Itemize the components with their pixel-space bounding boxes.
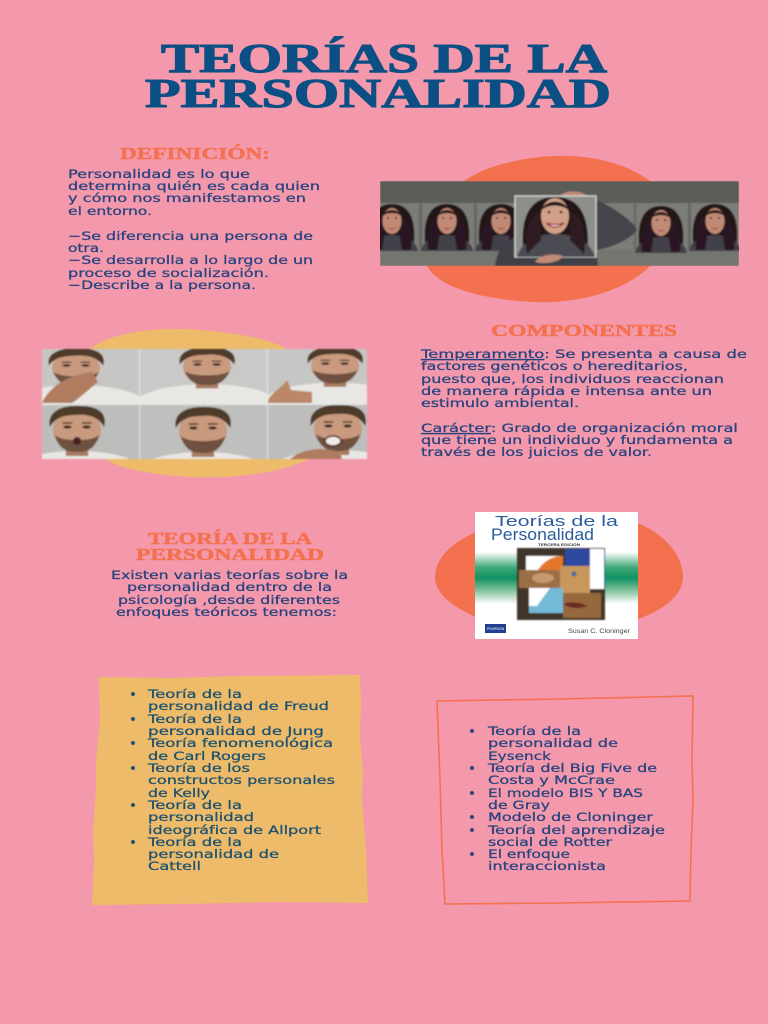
list: Teoría de la [147,687,242,701]
heading: teoría de la personalidad [136,529,324,564]
list: constructos personales [148,773,335,787]
list: Costa y McCrae [488,773,615,787]
text block: componentes: factores genéticos o hereditarios, [421,359,688,373]
text block: definición: −Describe a la persona. [68,278,256,292]
book cover: Personalidad [491,525,594,544]
list: personalidad de Freud [148,699,329,713]
text block: definición: otra. [68,241,104,255]
yellow paper background [92,675,368,905]
text block: teorías intro: personalidad dentro de la [127,580,332,594]
text block: definición: el entorno. [68,204,152,218]
list: Teoría de la [147,835,242,849]
panel: left list of theories [92,675,368,905]
list [470,724,665,873]
title [145,35,611,116]
list: Teoría de la [487,724,581,738]
list: Modelo de Cloninger [488,810,653,824]
text block: componentes: puesto que, los individuos reaccionan [421,372,724,386]
text block: teorías intro: enfoques teóricos tenemos: [116,605,337,619]
cell: angry [268,404,368,460]
cell: doubtful [140,404,268,460]
list: El enfoque [488,847,570,861]
text block: componentes: Temperamento : Se presenta a causa de [420,347,747,361]
heading: teoría de la personalidad: PERSONALIDAD [136,545,324,564]
list: Teoría del aprendizaje [487,823,665,837]
list: Teoría fenomenológica [147,736,333,750]
list: social de Rotter [488,835,612,849]
cell: surprised [42,404,140,460]
text block: componentes: que tiene un individuo y fundamenta a [421,433,733,447]
list [131,687,335,873]
list: personalidad de [488,736,618,750]
text block: componentes [420,347,747,459]
list: de Gray [488,798,550,812]
list: personalidad [148,810,254,824]
list: ideográfica de Allport [148,823,321,837]
title: TEORÍAS DE LA [161,35,608,81]
list: de Carl Rogers [148,749,266,763]
text block: teorías intro: psicología ,desde diferentes [118,593,340,607]
text block: definición: y cómo nos manifestamos en [68,191,306,205]
text block: definición: −Se diferencia una persona de [68,229,313,243]
text block: definición: proceso de socialización. [68,266,269,280]
text block: componentes: Carácter : Grado de organización moral [421,421,738,435]
cell: thumbs up [267,348,368,404]
book cover: PEARSON [487,627,505,631]
list: El modelo BIS Y BAS [488,786,643,800]
list: de Kelly [148,786,210,800]
heading: teoría de la personalidad: TEORÍA DE LA [148,529,313,548]
yellow blob behind men photo [84,329,321,477]
list: personalidad de [148,847,279,861]
photo: women with masks [366,181,741,266]
orange blob behind women photo [424,156,666,302]
book cover [475,512,638,639]
text block: componentes: través de los juicios de valor. [421,445,652,459]
panel: right list of theories [437,696,693,904]
book cover: Teorías de la [495,513,619,530]
list: Eysenck [488,749,551,763]
text block: componentes: de manera rápida e intensa ante un [421,384,712,398]
text block: componentes: estimulo ambiental. [421,396,579,410]
text block: definición: determina quién es cada quien [68,179,320,193]
book cover: Susan C. Cloninger [568,629,630,635]
text block: definición: −Se desarrolla a lo largo de un [68,253,313,267]
list: Teoría de los [147,761,250,775]
list: Teoría de la [147,798,242,812]
book cover: TERCERA EDICIÓN [538,542,580,547]
text block: definición [68,167,320,292]
text block: teorías intro [111,568,348,619]
cell: hand over mouth [42,348,140,404]
photo: man expressions grid [41,348,368,460]
list: Cattell [148,859,201,873]
text block: definición: Personalidad es lo que [68,167,250,181]
cell: neutral [140,348,268,396]
list: interaccionista [488,859,606,873]
heading: definición: DEFINICIÓN: [120,144,270,163]
text block: teorías intro: Existen varias teorías sobre la [111,568,348,582]
list: Teoría del Big Five de [487,761,657,775]
list: personalidad de Jung [148,724,324,738]
hand-drawn orange frame [437,696,693,904]
title: PERSONALIDAD [145,70,611,116]
list: Teoría de la [147,712,242,726]
orange blob behind book [435,515,683,632]
heading: componentes: COMPONENTES [491,321,677,340]
